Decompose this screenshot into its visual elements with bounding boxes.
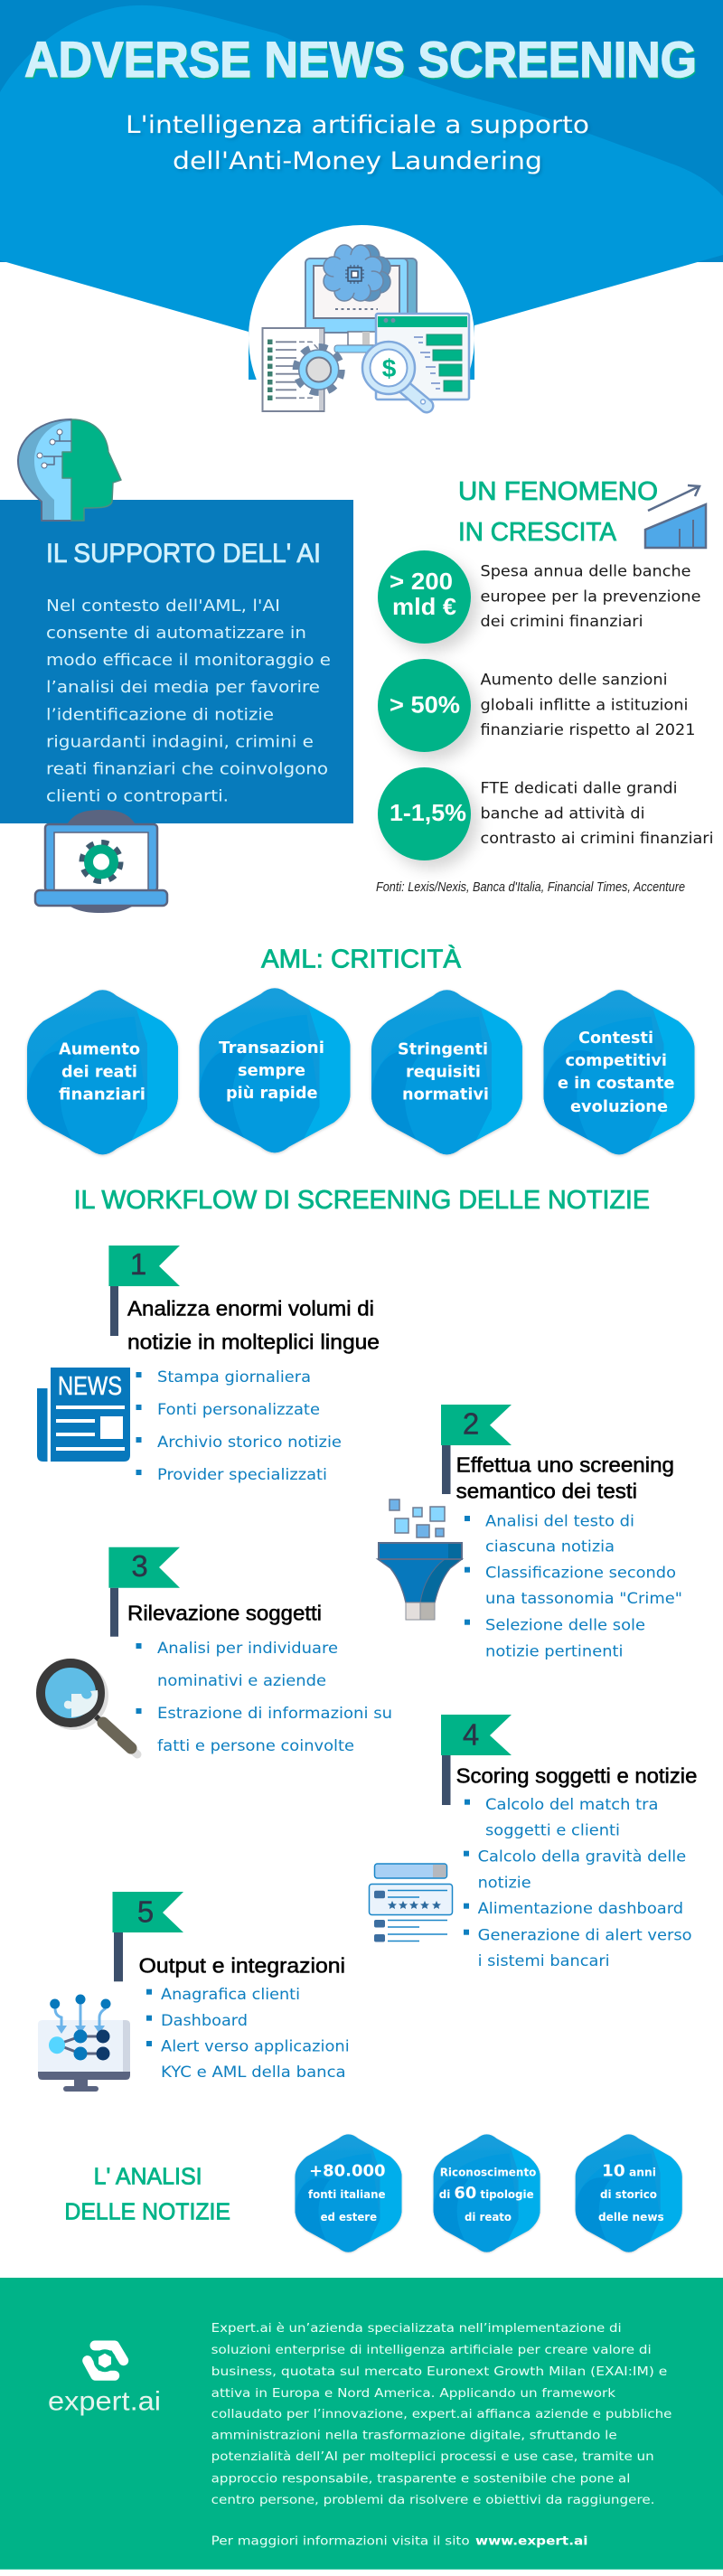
step 4 bullets: Calcolo del match tra — [485, 1796, 658, 1813]
hexagon: transazioni: sempre — [238, 1061, 305, 1080]
step 5 title: Output e integrazioni — [139, 1953, 345, 1977]
hexagon: transazioni: Transazioni — [219, 1039, 324, 1058]
small hexagon: tipologie di reato: di 60 tipologie — [439, 2184, 534, 2203]
hexagon: contesti: Contesti — [578, 1029, 653, 1048]
step 1 — [37, 1246, 380, 1483]
step 3 bullets: Analisi per individuare — [157, 1640, 338, 1657]
website line — [211, 2535, 587, 2549]
heading: AML criticità: AML: CRITICITÀ — [261, 945, 462, 974]
flag 1: 1 — [130, 1247, 146, 1281]
hexagon: requisiti: requisiti — [406, 1063, 481, 1082]
hexagon: contesti: evoluzione — [570, 1097, 668, 1116]
step 3 title: Rilevazione soggetti — [127, 1601, 322, 1624]
text block: AI description: l’identificazione di notizie — [46, 705, 274, 725]
footer panel — [0, 2278, 723, 2570]
website line: www.expert.ai — [475, 2535, 587, 2549]
sources note: Fonti: Lexis/Nexis, Banca d'Italia, Financial Times, Accenture — [376, 880, 685, 895]
text block: AI description: l’analisi dei media per favorire — [46, 678, 320, 697]
text block: AI description: modo efficace il monitoraggio e — [46, 651, 331, 670]
step 5 bullets: KYC e AML della banca — [161, 2064, 346, 2081]
step 5 bullets: Dashboard — [161, 2012, 248, 2029]
stat: FTE: banche ad attività di — [481, 804, 645, 823]
hexagon: aumento reati: dei reati — [61, 1063, 137, 1082]
small hexagon: fonti — [295, 2134, 404, 2257]
small hexagon: fonti: ed estere — [321, 2211, 377, 2223]
stat: spesa annua — [378, 550, 701, 644]
text block: AI description: reati finanziari che coinvolgono — [46, 759, 328, 779]
step 1 bullets: Stampa giornaliera — [157, 1368, 311, 1386]
step 1 bullets — [136, 1368, 342, 1483]
stat: FTE: FTE dedicati dalle grandi — [481, 779, 678, 797]
small hexagon: fonti: fonti italiane — [308, 2188, 385, 2201]
step 5 bullets: Anagrafica clienti — [161, 1986, 300, 2003]
hexagon: contesti: competitivi — [566, 1051, 667, 1070]
flag 2: 2 — [463, 1407, 479, 1441]
stat: sanzioni: > 50% — [390, 691, 460, 719]
icon: rating list — [369, 1864, 452, 1941]
step 4 bullets: i sistemi bancari — [478, 1952, 610, 1970]
icon: AI head — [18, 419, 121, 521]
flag 3: 3 — [131, 1549, 148, 1583]
icon: newspaper — [37, 1368, 130, 1462]
panel: il supporto dell'AI — [0, 500, 353, 823]
text block: AI description: riguardanti indagini, crimini e — [46, 732, 314, 752]
hexagon: aumento reati: Aumento — [59, 1040, 140, 1059]
step 4 bullets: Calcolo della gravità delle — [478, 1847, 686, 1865]
step 2 bullets: notizie pertinenti — [485, 1642, 624, 1659]
step 4 bullets: soggetti e clienti — [485, 1822, 620, 1839]
subtitle: L'intelligenza artificiale a supporto — [126, 111, 589, 139]
step 2 title: Effettua uno screening — [456, 1453, 674, 1476]
icon: magnifier with dollar: $ — [382, 354, 397, 382]
text block: company description: centro persone, problemi da risolvere e obiettivi da raggiungere. — [211, 2494, 654, 2507]
hexagon: contesti: e in costante — [558, 1074, 674, 1093]
hexagon: requisiti: normativi — [402, 1086, 489, 1105]
text block: company description: approccio responsabile, trasparente e sostenibile che pone al — [211, 2473, 630, 2487]
text block: company description: Expert.ai è un’azienda specializzata nell’implementazione di — [211, 2321, 622, 2336]
small hexagon: tipologie di reato: di reato — [465, 2211, 512, 2223]
icon: laptop with gear — [35, 810, 167, 913]
step 4 — [369, 1715, 697, 1970]
step 1 title — [127, 1297, 380, 1354]
stat: FTE: 1-1,5% — [390, 799, 466, 826]
stat: spesa annua: > 200 — [390, 568, 453, 595]
step 3 — [40, 1547, 392, 1754]
heading: l'analisi delle notizie: L' ANALISI — [94, 2163, 202, 2190]
icon: growth chart — [645, 485, 706, 548]
hexagon: aumento reati: finanziari — [59, 1086, 146, 1105]
stat: spesa annua: dei crimini finanziari — [481, 613, 643, 631]
text block: company description: potenzialità dell’AI per molteplici processi e use case, tramite un — [211, 2449, 654, 2464]
hero illustration — [262, 245, 469, 411]
heading: un fenomeno in crescita — [458, 477, 658, 547]
step 2 — [378, 1405, 682, 1659]
flag 4: 4 — [463, 1718, 479, 1752]
small hexagon: anni di storico: di storico — [600, 2188, 657, 2201]
small hexagon: anni di storico: 10 anni — [602, 2161, 656, 2180]
text block: company description: collaudato per l’innovazione, expert.ai affianca aziende e pubbliche — [211, 2408, 671, 2421]
icon: monitor network — [38, 1994, 130, 2092]
step 1 bullets: Archivio storico notizie — [157, 1434, 342, 1451]
small hexagon: anni di storico — [576, 2134, 684, 2257]
header background — [0, 0, 723, 380]
icon: gear — [296, 347, 342, 392]
stat: sanzioni: finanziarie rispetto al 2021 — [481, 721, 696, 739]
heading: l'analisi delle notizie: DELLE NOTIZIE — [64, 2197, 230, 2224]
step 2 title — [456, 1453, 674, 1503]
step 4 bullets — [464, 1796, 692, 1970]
step 2 bullets: Classificazione secondo — [485, 1564, 676, 1581]
step 2 bullets: una tassonomia "Crime" — [485, 1590, 682, 1607]
icon: monitor — [305, 259, 417, 353]
small hexagon: tipologie di reato: Riconoscimento — [440, 2166, 536, 2178]
white circle behind illustration — [249, 225, 474, 451]
heading: un fenomeno in crescita: IN CRESCITA — [458, 518, 617, 547]
stat: sanzioni: globali inflitte a istituzioni — [481, 696, 689, 714]
step 4 bullets: notizie — [478, 1874, 531, 1891]
step 1 bullets: Fonti personalizzate — [157, 1401, 320, 1418]
stat: spesa annua: mld € — [392, 593, 456, 620]
hexagon: requisiti — [371, 990, 525, 1161]
step 2 bullets: Analisi del testo di — [485, 1512, 634, 1529]
icon: brain chip — [324, 245, 390, 301]
small hexagon: tipologie di reato — [434, 2134, 542, 2257]
step 3 bullets: Estrazione di informazioni su — [157, 1705, 392, 1722]
step 1 title: notizie in molteplici lingue — [127, 1330, 380, 1354]
step 2 title: semantico dei testi — [456, 1480, 637, 1503]
subtitle: dell'Anti-Money Laundering — [173, 147, 542, 175]
flag 2 — [441, 1405, 512, 1494]
step 4 bullets: Alimentazione dashboard — [478, 1900, 683, 1917]
step 3 bullets: fatti e persone coinvolte — [157, 1737, 354, 1754]
text block: company description: soluzioni enterprise di intelligenza artificiale per creare valore di — [211, 2344, 652, 2357]
step 2 bullets: ciascuna notizia — [485, 1538, 615, 1556]
stat: sanzioni: Aumento delle sanzioni — [481, 671, 667, 689]
text block: company description: business, quotata sul mercato Euronext Growth Milan (EXAI:IM) e — [211, 2365, 667, 2379]
flag 4 — [441, 1715, 512, 1805]
text block: AI description: consente di automatizzare in — [46, 624, 306, 643]
heading: workflow: IL WORKFLOW DI SCREENING DELLE NOTIZIE — [74, 1186, 650, 1215]
step 5 bullets: Alert verso applicazioni — [161, 2037, 350, 2054]
hexagon: transazioni — [199, 988, 352, 1160]
step 4 title: Scoring soggetti e notizie — [456, 1763, 697, 1787]
subtitle — [126, 111, 589, 175]
text block: AI description — [46, 597, 331, 806]
hexagon: contesti — [544, 990, 698, 1161]
text block: company description: attiva in Europa e Nord America. Applicando un framework — [211, 2387, 615, 2401]
small hexagon: fonti: +80.000 — [309, 2161, 385, 2180]
text block: AI description: clienti o controparti. — [46, 786, 229, 806]
flag 1 — [108, 1246, 180, 1336]
flag 5: 5 — [137, 1895, 154, 1929]
text block: company description — [211, 2321, 671, 2507]
logo: expert.ai: expert.ai — [48, 2387, 161, 2417]
hexagon: transazioni: più rapide — [226, 1084, 318, 1103]
stat: spesa annua: europee per la prevenzione — [481, 588, 701, 606]
step 5 bullets — [146, 1986, 350, 2081]
step 3 bullets — [136, 1640, 392, 1754]
flag 3 — [108, 1547, 180, 1637]
heading: l'analisi delle notizie — [64, 2163, 230, 2224]
icon: magnifier with dollar — [362, 342, 427, 406]
icon: document — [262, 328, 324, 411]
icon: newspaper: NEWS — [58, 1372, 122, 1401]
flag 5 — [112, 1892, 183, 1981]
icon: funnel — [378, 1500, 462, 1620]
hexagon: aumento reati — [27, 990, 181, 1161]
stat: FTE — [378, 767, 714, 860]
step 4 bullets: Generazione di alert verso — [478, 1926, 692, 1943]
heading: il supporto: IL SUPPORTO DELL' AI — [46, 539, 321, 569]
website line: Per maggiori informazioni visita il sito — [211, 2535, 470, 2549]
step 2 bullets: Selezione delle sole — [485, 1616, 645, 1633]
stat: sanzioni — [378, 659, 696, 752]
step 1 title: Analizza enormi volumi di — [127, 1297, 374, 1321]
small hexagon: anni di storico: delle news — [598, 2211, 664, 2223]
stat: FTE: contrasto ai crimini finanziari — [481, 830, 714, 848]
icon: magnifier with puzzle — [40, 1661, 137, 1754]
text block: AI description: Nel contesto dell'AML, l'AI — [46, 597, 280, 616]
step 3 bullets: nominativi e aziende — [157, 1672, 326, 1689]
step 2 bullets — [465, 1512, 682, 1659]
hexagon: requisiti: Stringenti — [398, 1040, 488, 1059]
stat: spesa annua: Spesa annua delle banche — [481, 562, 690, 580]
step 5 — [38, 1892, 350, 2092]
text block: company description: amministrazioni nella trasformazione digitale, sfruttando le — [211, 2430, 617, 2443]
step 1 bullets: Provider specializzati — [157, 1466, 327, 1483]
icon: dashboard panel — [376, 314, 469, 400]
heading: un fenomeno in crescita: UN FENOMENO — [458, 477, 658, 506]
logo: expert.ai — [48, 2346, 161, 2417]
